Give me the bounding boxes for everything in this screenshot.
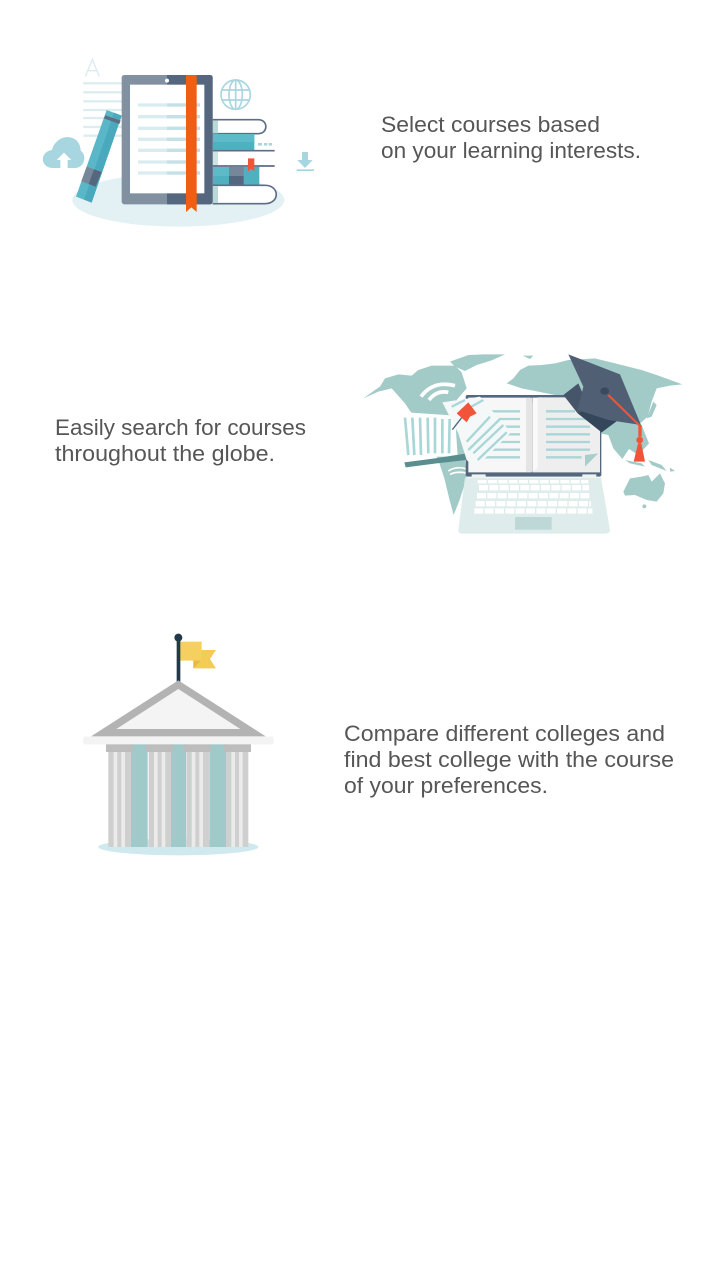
- text: select courses: Select courses based: [381, 112, 600, 137]
- pinned note: [442, 397, 511, 468]
- icon: globe: [221, 80, 250, 109]
- icon: download: [297, 152, 314, 171]
- tablet: [122, 75, 213, 204]
- text: select courses: [381, 112, 641, 163]
- text: compare colleges: Compare different colleges and: [344, 721, 665, 746]
- flag pole: [174, 634, 182, 682]
- illustration: world map, laptop and graduation cap: [363, 354, 682, 534]
- ground ellipse: [98, 839, 258, 855]
- receipt paper: [397, 412, 467, 467]
- text: search courses: throughout the globe.: [55, 441, 275, 466]
- orange bookmark: [186, 75, 197, 212]
- laptop base with keyboard: [458, 474, 610, 534]
- illustration: tablet and books: [43, 59, 314, 227]
- laptop screen with open book: [466, 395, 601, 477]
- ground ellipse: [72, 173, 284, 227]
- cornice: [83, 737, 274, 744]
- world map: [363, 354, 682, 515]
- text: compare colleges: find best college with the course: [344, 747, 674, 772]
- text: select courses: on your learning interests.: [381, 138, 641, 163]
- illustration: college building: [83, 634, 274, 855]
- graduation cap: [563, 354, 645, 462]
- stack of books: [213, 120, 276, 204]
- icon: cloud upload: [43, 137, 84, 168]
- teal wall panels: [131, 744, 226, 847]
- text: search courses: Easily search for courses: [55, 415, 306, 440]
- text: compare colleges: of your preferences.: [344, 773, 548, 798]
- roof: [91, 680, 266, 736]
- wifi arcs: [421, 384, 455, 400]
- text: search courses: [55, 415, 306, 466]
- columns: [106, 744, 251, 847]
- flag: [178, 642, 216, 668]
- white arcs on map: [448, 468, 467, 474]
- text: compare colleges: [344, 721, 674, 798]
- marker pen: [76, 110, 122, 203]
- letter A: [85, 59, 99, 77]
- background text lines: [83, 83, 123, 136]
